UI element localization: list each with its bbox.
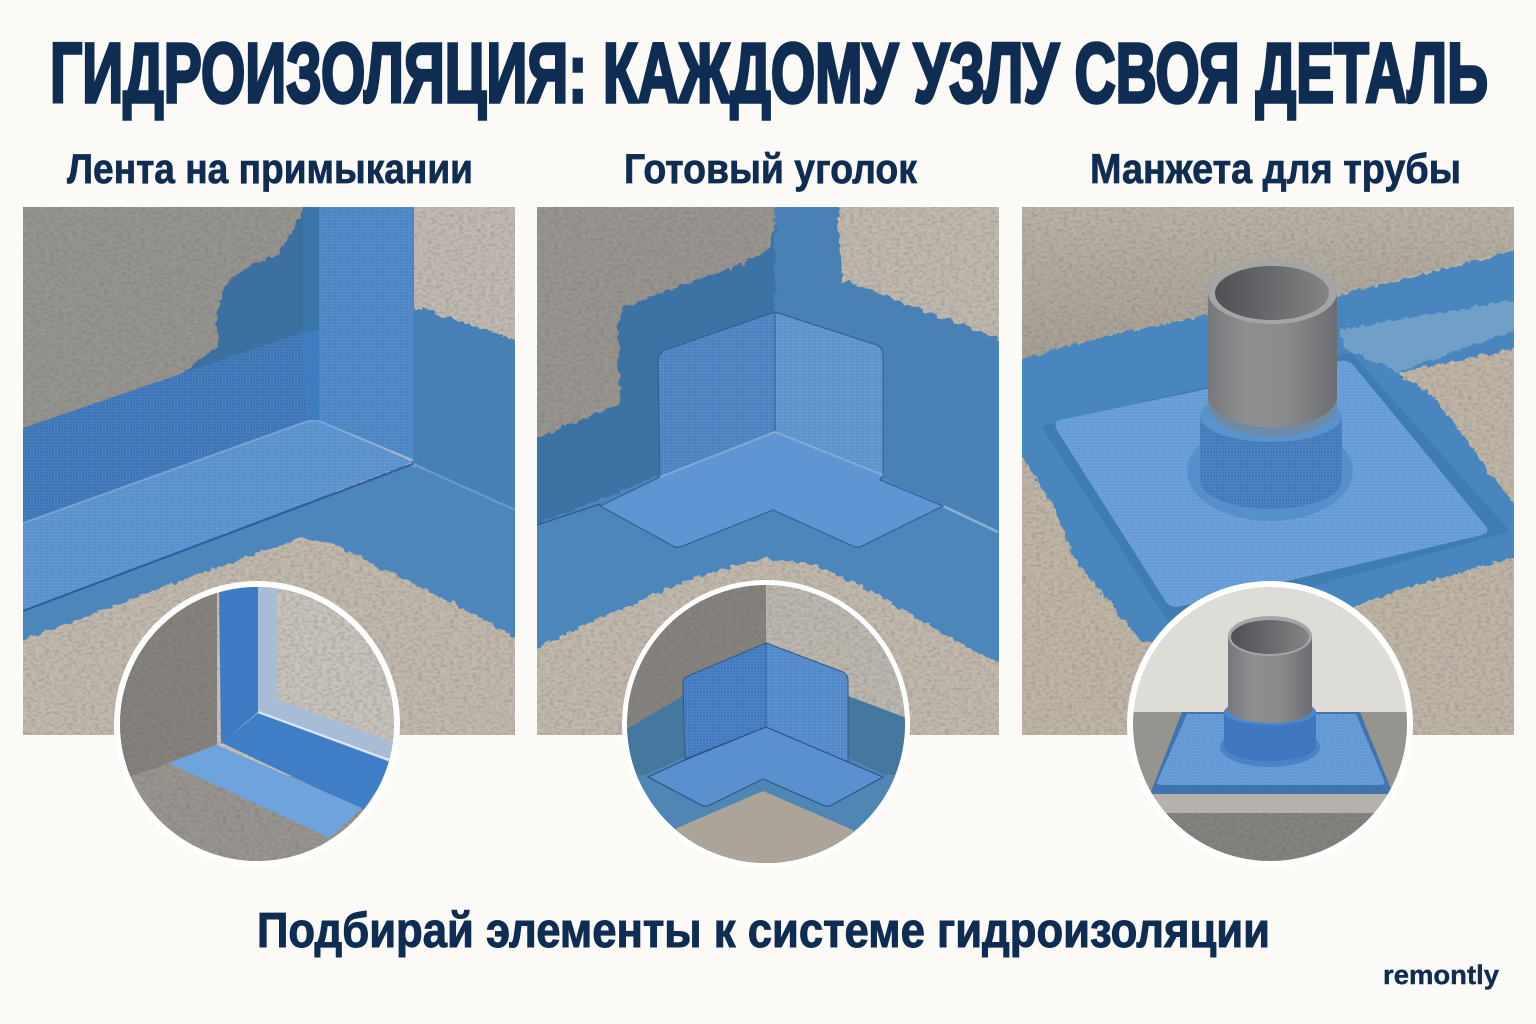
corner piece <box>600 312 943 547</box>
inset circle: pipe detail <box>1127 581 1413 867</box>
plate rim <box>1046 356 1505 622</box>
horizontal tape floor <box>23 421 413 610</box>
inset flange and collar <box>1220 740 1320 767</box>
inset plate <box>1150 712 1393 794</box>
inset tape <box>219 586 258 744</box>
vertical tape <box>303 207 414 460</box>
panel: ready corner <box>532 205 1004 735</box>
inset circle: tape detail <box>114 581 407 867</box>
inset pipe <box>1228 636 1312 723</box>
panel: pipe collar <box>1016 207 1520 735</box>
footer caption: Подбирай элементы к системе гидроизоляции <box>257 904 1270 958</box>
plate <box>1055 361 1488 607</box>
inset circle: corner detail <box>620 580 912 870</box>
brand logo text: remontly <box>1383 960 1499 990</box>
horizontal tape wall <box>23 332 308 523</box>
inset corner piece <box>683 643 766 759</box>
collar <box>1200 404 1342 509</box>
heading: corner: Готовый уголок <box>624 145 918 192</box>
pipe <box>1208 260 1337 436</box>
heading: pipe collar: Манжета для трубы <box>1090 145 1461 192</box>
heading: tape: Лента на примыкании <box>67 145 473 192</box>
flange <box>1187 444 1353 521</box>
panel: tape at junction <box>18 205 520 735</box>
